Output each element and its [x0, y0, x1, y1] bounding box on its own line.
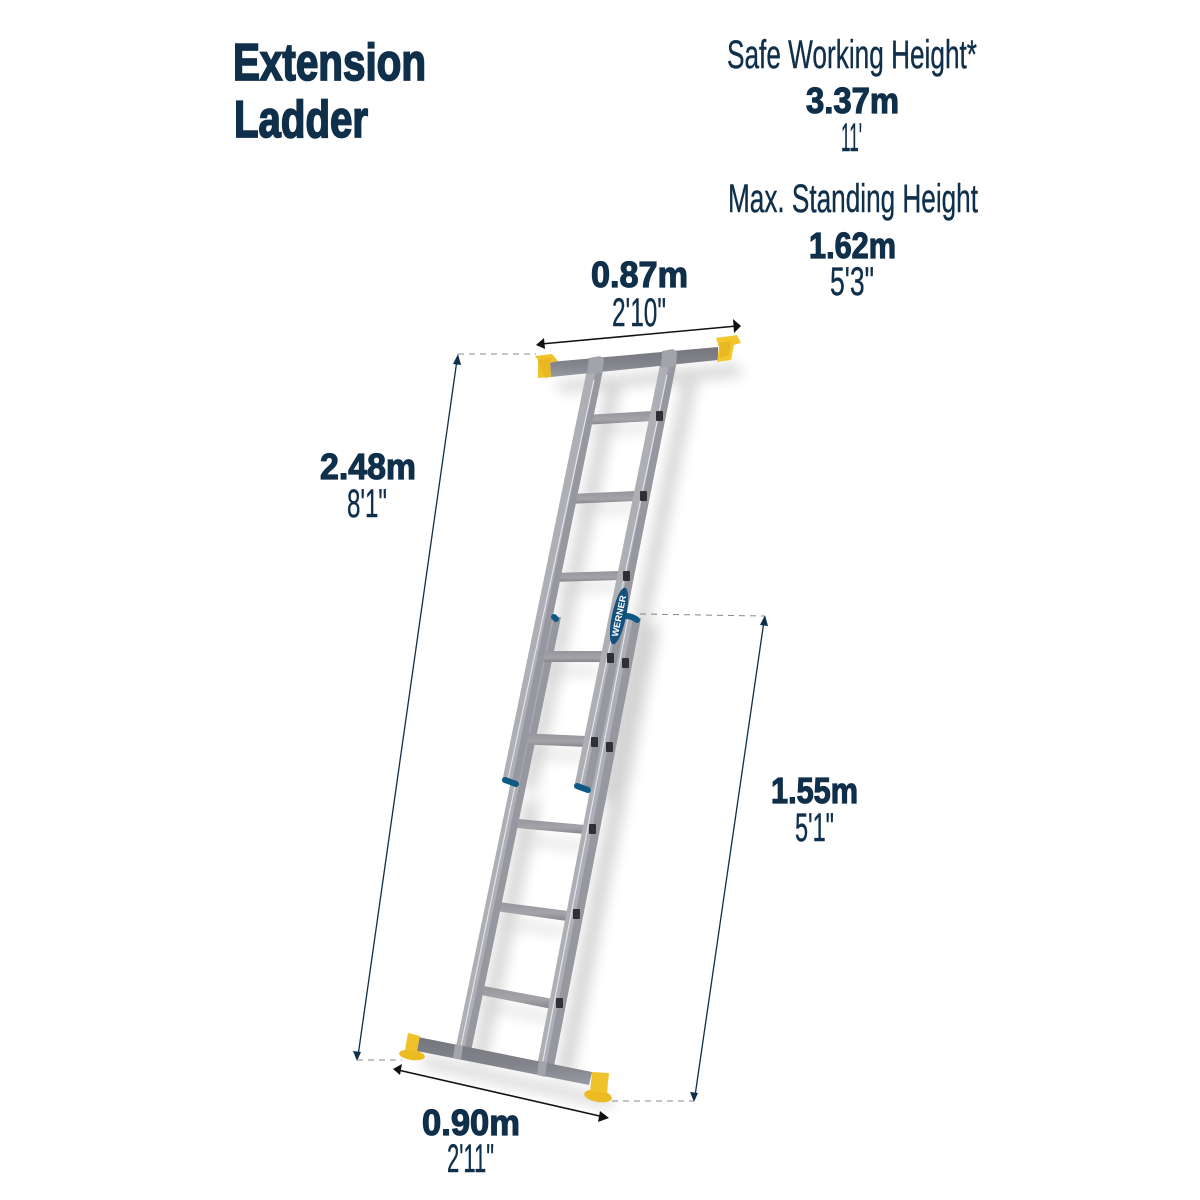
dimension: bottom width 0.90m: 0.90m [422, 1102, 520, 1143]
dimension: length 2.48m: 2.48m [320, 446, 416, 487]
brand label: Werner: WERNER [610, 594, 628, 638]
title: Ladder [234, 91, 368, 149]
spec: safe working height: 11' [841, 116, 862, 160]
ladder illustration [398, 335, 742, 1108]
brand label: Werner [606, 586, 632, 646]
upper section rungs [518, 411, 652, 747]
dimension: length 2.48m: 8'1" [347, 482, 387, 526]
top stabiliser bar [550, 347, 718, 377]
title: Extension [233, 34, 426, 92]
dimension: top width 0.87m: 2'10" [612, 291, 666, 335]
spec: safe working height: 3.37m [806, 80, 899, 121]
title [233, 34, 426, 149]
dimension: closed height 1.55m: 1.55m [771, 770, 858, 811]
spec: safe working height [727, 33, 977, 160]
dimension: closed height 1.55m: 5'1" [795, 806, 834, 850]
bottom stabiliser bar [417, 1037, 592, 1085]
yellow foot: top left [535, 354, 558, 378]
dimension: top width 0.87m [536, 254, 741, 349]
yellow foot: top right [716, 335, 741, 362]
spec: safe working height: Safe Working Height* [727, 33, 977, 77]
dimension: top width 0.87m: 0.87m [591, 254, 688, 295]
spec: max standing height: Max. Standing Height [728, 177, 978, 221]
spec: max standing height [728, 177, 978, 304]
upper section rails [502, 355, 678, 788]
lower section rails [454, 617, 641, 1066]
lower section rungs [471, 818, 585, 1009]
rung brackets [556, 411, 663, 1008]
dimension: bottom width 0.90m [393, 1064, 609, 1181]
yellow foot: bottom right [583, 1072, 613, 1104]
rail end caps [505, 616, 637, 790]
dimension: bottom width 0.90m: 2'11" [447, 1137, 494, 1181]
ladder shadow [420, 364, 742, 1108]
yellow foot: bottom left [398, 1033, 426, 1062]
spec: max standing height: 5'3" [830, 260, 874, 304]
spec: max standing height: 1.62m [809, 225, 896, 266]
dimension: length 2.48m [320, 354, 536, 1061]
dimension: closed height 1.55m [612, 614, 858, 1102]
